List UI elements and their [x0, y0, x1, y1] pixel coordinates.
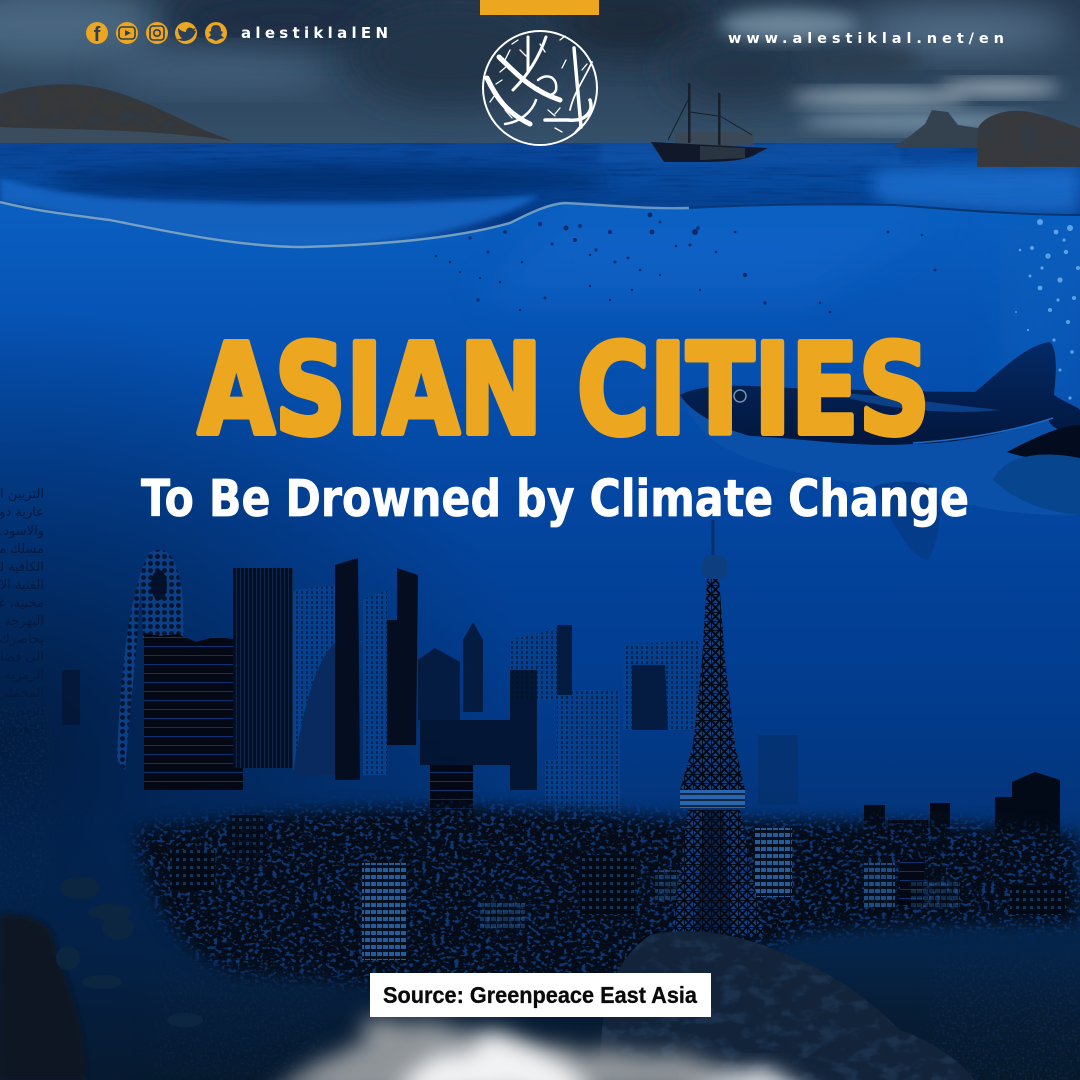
source label: [370, 973, 711, 1017]
website url: www.alestiklal.net/en: [728, 31, 1004, 47]
buildings: mid skyline: [418, 622, 668, 730]
island: left headland: [0, 84, 232, 143]
building: dark tower: [233, 568, 293, 768]
social media icons: [86, 22, 227, 46]
icon: snapchat: [205, 22, 227, 44]
arabic newspaper column: الى فضا: [0, 650, 44, 665]
building: cocoon tower: [117, 550, 184, 770]
icon: twitter: [175, 22, 197, 44]
arabic newspaper column: [0, 487, 44, 737]
icon: cocoon oval: [151, 570, 167, 600]
icon: sailing boat: [651, 83, 768, 162]
arabic newspaper column: الابداع: [11, 722, 44, 737]
social handle: alestiklalEN: [241, 24, 388, 42]
bubbles: centre: [435, 213, 936, 313]
icon: facebook: f: [94, 24, 101, 46]
seabed: left rocks: [0, 690, 1080, 1080]
dense city fabric: [129, 796, 1080, 992]
white foam cloud: [240, 1020, 830, 1080]
seabed: central rock: [600, 931, 975, 1080]
background: storm sky: [0, 0, 1080, 145]
building: twin towers: [335, 558, 418, 780]
skyline: [0, 520, 1080, 1000]
building: cone tower: [293, 643, 335, 775]
bubbles: right: [1015, 219, 1080, 403]
fish silhouettes: [56, 877, 203, 1027]
icon: tokyo tower: [671, 520, 764, 935]
icon: facebook: [86, 22, 108, 46]
buildings: halftone background: [293, 585, 698, 855]
buildings: right cluster: [864, 772, 1060, 890]
building: lined block: [144, 633, 243, 790]
icon: instagram: [146, 22, 168, 44]
icon: youtube: [116, 22, 138, 44]
source label: Source: Greenpeace East Asia: [383, 982, 697, 1008]
background: sea surface: [0, 143, 1080, 251]
orange top tab: [480, 0, 599, 15]
arabic newspaper column: لترتقي: [8, 704, 44, 719]
logo: calligraphy roundel: [483, 31, 597, 145]
rocks: right: [892, 110, 1080, 167]
shark: [680, 342, 1080, 560]
